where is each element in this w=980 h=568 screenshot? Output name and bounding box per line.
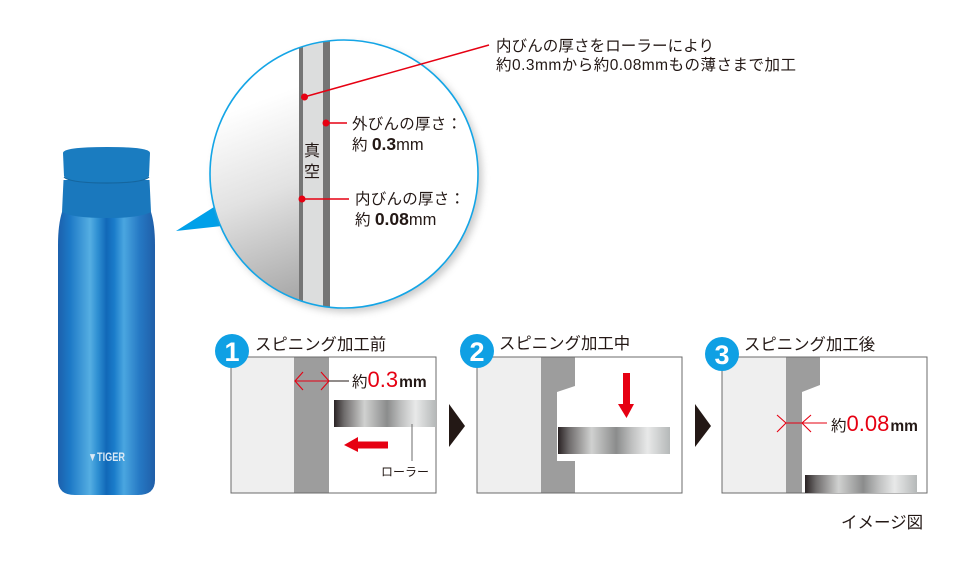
top note text: 約0.3mmから約0.08mmもの薄さまで加工	[496, 56, 796, 74]
outer wall label: 外びんの厚さ：	[352, 115, 462, 133]
product: blue vacuum bottle	[58, 147, 155, 495]
top note text: 内びんの厚さをローラーにより	[496, 37, 714, 55]
callout pointer	[176, 207, 222, 231]
roller 2	[558, 427, 670, 454]
inner wall label: 内びんの厚さ：	[355, 190, 465, 208]
step badge 2	[460, 334, 494, 368]
panel 3: after spinning	[722, 357, 927, 493]
panel 1: before spinning	[231, 357, 436, 493]
thickness marker 0.08mm	[777, 411, 918, 436]
vacuum label: 空	[304, 163, 320, 181]
roller label	[381, 424, 429, 479]
thickness marker 0.3mm	[295, 367, 427, 392]
arrow 2 to 3	[695, 404, 711, 447]
roller 3	[805, 475, 917, 493]
step badge 3: 3	[714, 340, 730, 370]
step heading 2: スピニング加工中	[499, 335, 630, 353]
step badge 1	[215, 334, 249, 368]
top note text	[496, 37, 796, 74]
step badge 1: 1	[224, 337, 240, 367]
step heading 1: スピニング加工前	[255, 336, 386, 354]
outer wall label: 約 0.3mm	[352, 134, 424, 154]
vacuum label: 真	[304, 142, 320, 160]
inner wall label: 約 0.08mm	[355, 209, 436, 229]
roller label: ローラー	[381, 465, 429, 479]
panel 2: during spinning	[477, 357, 682, 493]
thickness marker 0.3mm: 約0.3mm	[352, 367, 427, 392]
outer wall label	[352, 115, 462, 154]
roller 1	[334, 400, 436, 427]
leader line: outer wall	[322, 120, 347, 126]
image caption: イメージ図	[841, 514, 923, 532]
red left arrow	[344, 437, 388, 452]
thickness marker 0.08mm: 約0.08mm	[831, 411, 918, 436]
step heading 3: スピニング加工後	[744, 336, 875, 354]
inner wall label	[355, 190, 465, 229]
leader line: inner wall	[298, 196, 349, 202]
step badge 3	[705, 337, 739, 371]
arrow 1 to 2	[449, 404, 465, 447]
vacuum label	[304, 142, 320, 181]
red down arrow	[618, 373, 634, 418]
bottle logo: ▼TIGER	[88, 450, 125, 464]
step badge 2: 2	[469, 337, 485, 367]
leader line: top note	[301, 45, 489, 100]
magnified wall detail circle	[205, 40, 482, 312]
